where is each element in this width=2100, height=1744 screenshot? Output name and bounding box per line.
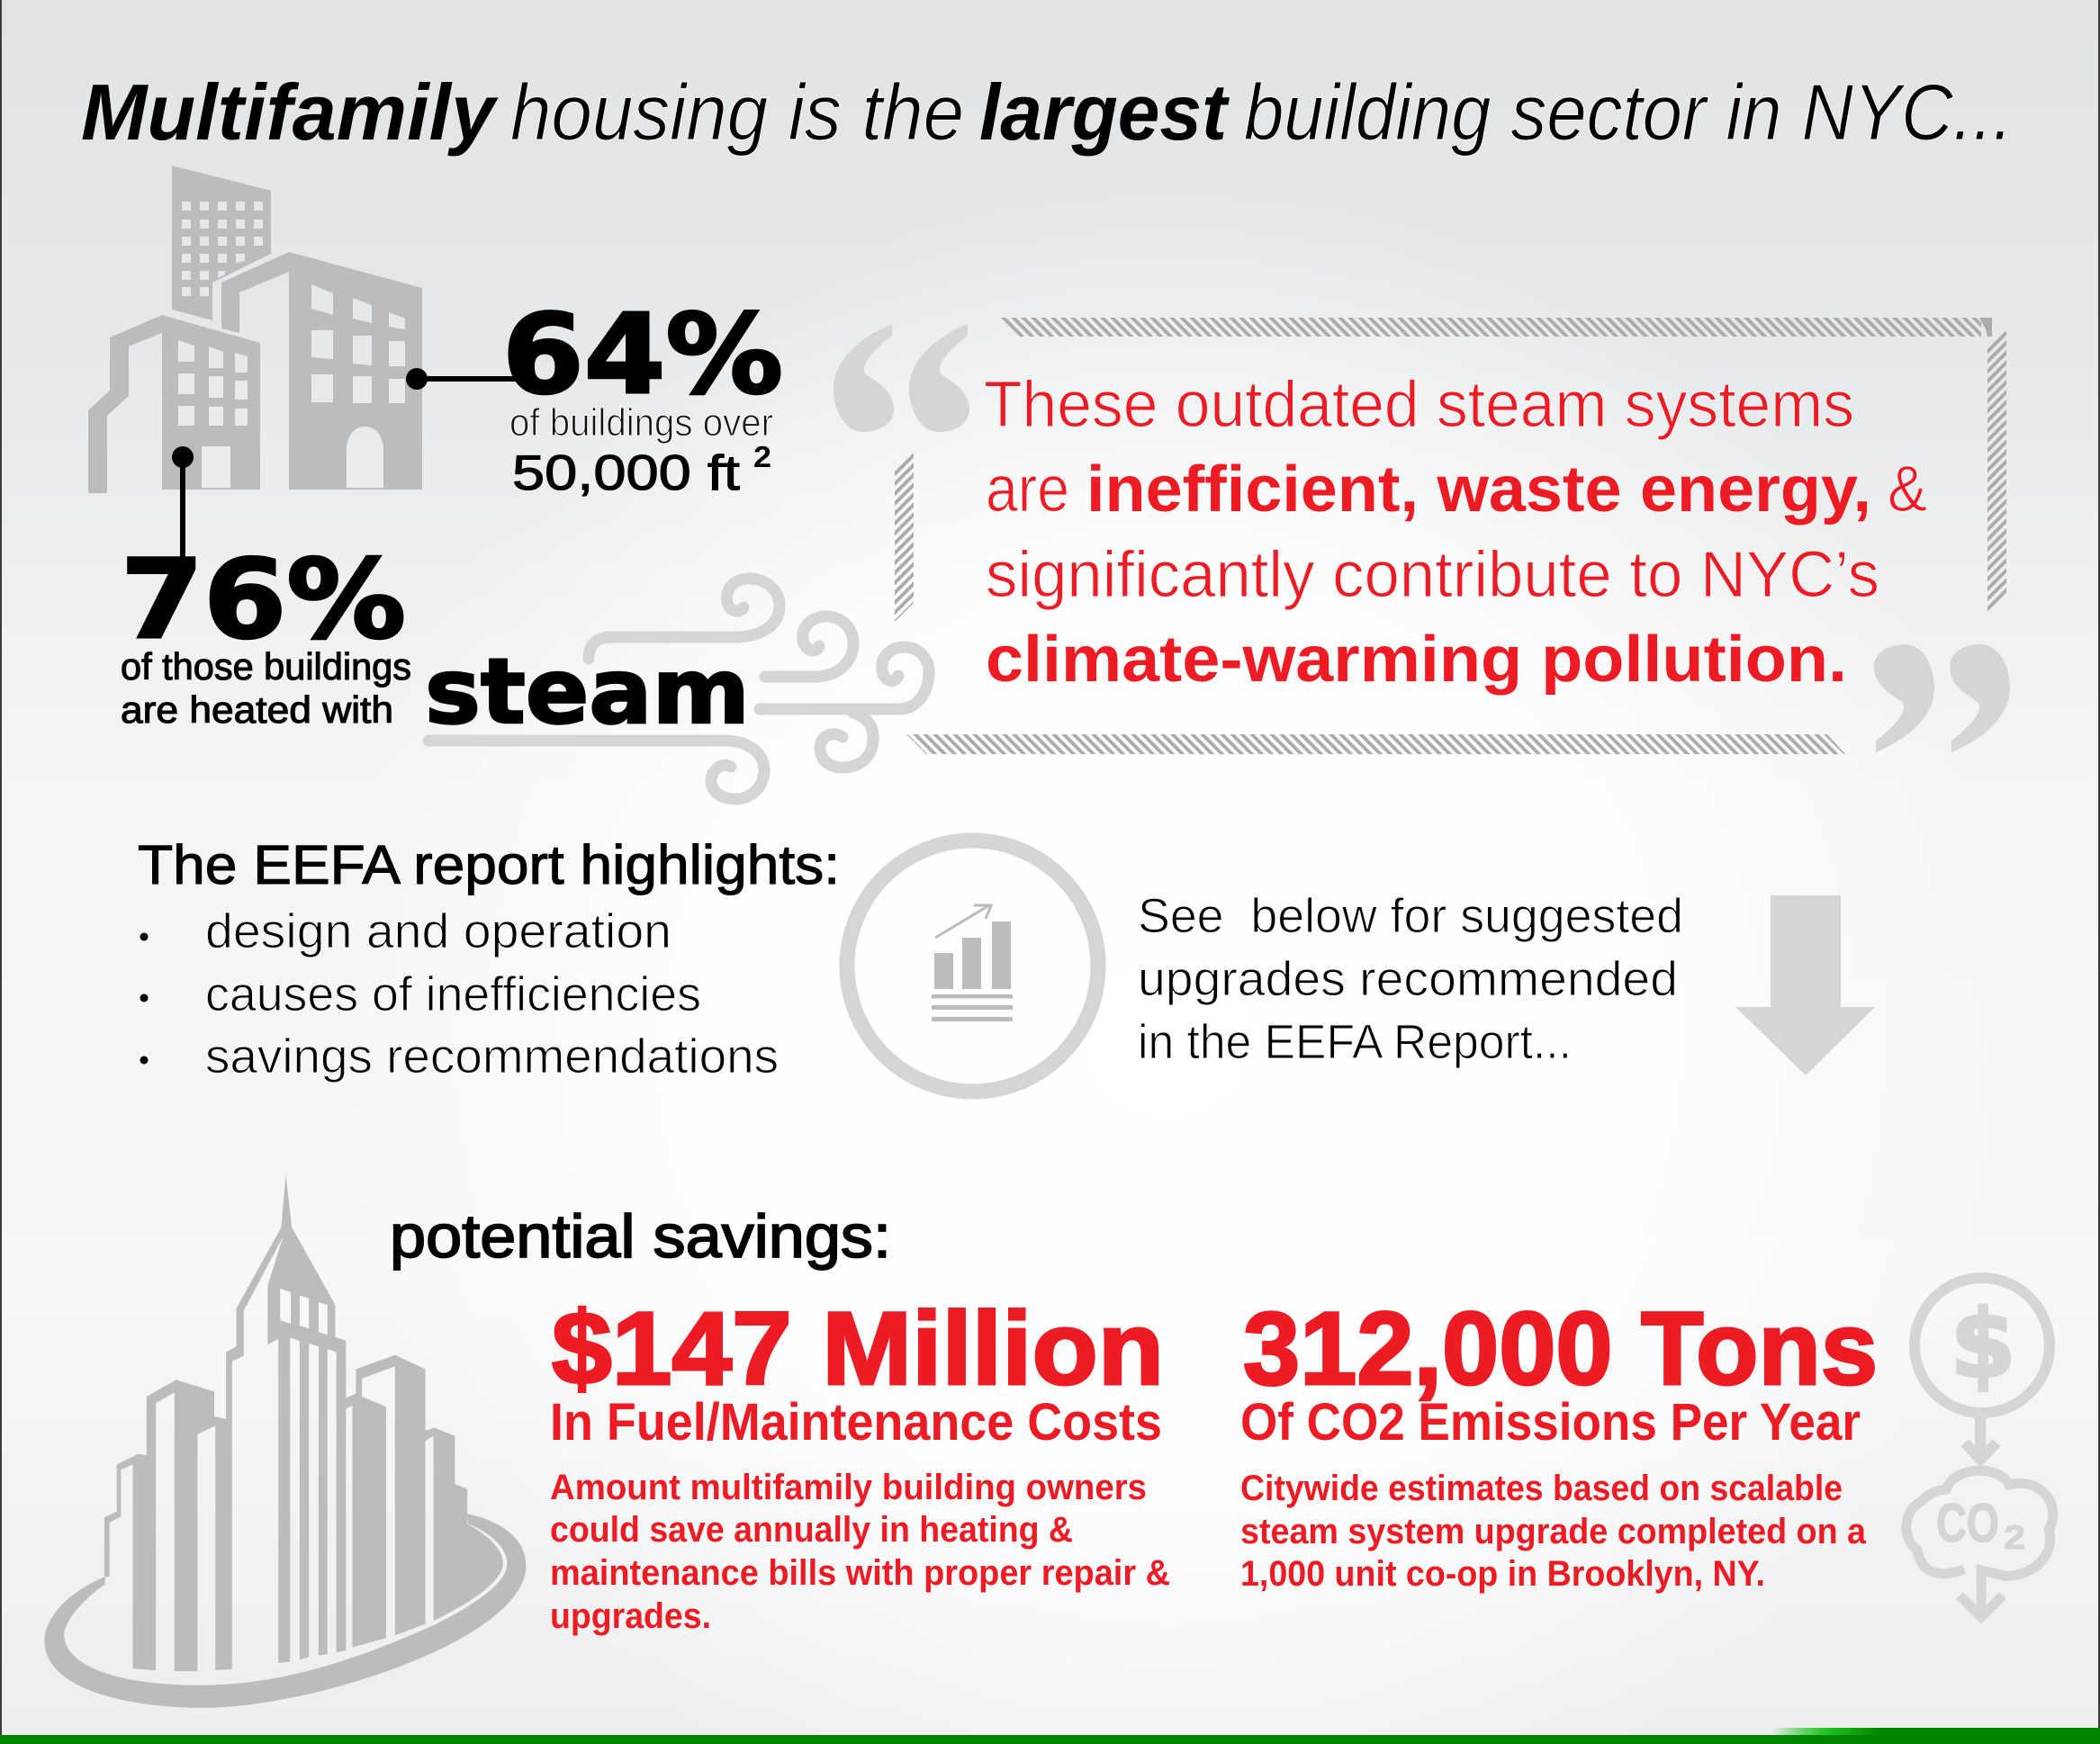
panel: cost savings: maintenance bills with proper repair & [550, 1553, 1170, 1593]
title: building sector in NYC... [1244, 67, 2013, 157]
highlights list: causes of inefficiencies [205, 967, 701, 1021]
icon: steam swirls [428, 579, 929, 799]
callout: 64% of buildings: of buildings over [509, 401, 773, 445]
quote frame [895, 318, 2006, 754]
front left building [88, 315, 260, 493]
callout: 64% of buildings: 2 [753, 440, 771, 473]
icon: dollar to CO2: $ [1951, 1290, 2015, 1399]
callout: 76% heated with steam: 76% [121, 536, 406, 663]
icon: closing quote mark [1874, 644, 2010, 752]
highlights list: design and operation [205, 904, 671, 958]
icon: report chart in circle [847, 841, 1098, 1092]
panel: emissions savings [1240, 1291, 1878, 1594]
quote text: inefficient, waste energy, [1086, 454, 1871, 526]
panel: emissions savings: Of CO2 Emissions Per Year [1240, 1393, 1861, 1452]
skyline [104, 1174, 503, 1671]
callout: 64% of buildings: 50,000 ft [512, 445, 740, 500]
icon: apartment buildings [88, 166, 422, 493]
text: see below: upgrades recommended [1138, 952, 1678, 1006]
callout: 76% heated with steam: steam [425, 639, 750, 744]
arrow: down [1735, 895, 1875, 1075]
middle building [221, 252, 422, 490]
title: housing is the [510, 67, 964, 157]
panel: cost savings: Amount multifamily building owners [550, 1468, 1147, 1507]
text: see below: in the EEFA Report... [1138, 1015, 1572, 1069]
callout: 76% heated with steam: are heated with [121, 688, 393, 731]
icon: dollar to CO2: 2 [2004, 1519, 2025, 1556]
icon: dollar to CO2 [1906, 1278, 2053, 1617]
quote text: & [1888, 454, 1927, 526]
text: see below: See below for suggested [1138, 889, 1683, 943]
callout: 64% of buildings [406, 291, 783, 500]
heading: EEFA report highlights: The EEFA report highlights: [138, 834, 840, 895]
icon: dollar to CO2: CO [1936, 1493, 1999, 1553]
callout: 64% of buildings: 64% [502, 291, 783, 418]
back tower [172, 166, 271, 320]
quote text: These outdated steam systems [984, 369, 1854, 441]
panel: cost savings: upgrades. [550, 1596, 711, 1636]
panel: emissions savings: 1,000 unit co-op in Brooklyn, NY. [1240, 1554, 1765, 1594]
text: see below [1138, 889, 1683, 1069]
callout: 76% heated with steam: of those buildings [121, 645, 411, 688]
title [81, 67, 2013, 157]
panel: cost savings: In Fuel/Maintenance Costs [550, 1393, 1162, 1452]
panel: cost savings: $147 Million [552, 1291, 1164, 1407]
quote text: are [986, 454, 1069, 526]
panel: cost savings [550, 1291, 1170, 1636]
swoosh [44, 1514, 526, 1708]
icon: opening quote mark [834, 324, 969, 432]
panel: cost savings: could save annually in heating & [550, 1510, 1073, 1550]
title: largest [979, 67, 1230, 157]
quote text: significantly contribute to NYC’s [986, 539, 1879, 611]
quote text [984, 369, 1927, 696]
panel: emissions savings: 312,000 Tons [1243, 1291, 1878, 1407]
highlights list: savings recommendations [205, 1029, 779, 1083]
panel: emissions savings: steam system upgrade completed on a [1240, 1512, 1867, 1551]
footer bar [0, 1728, 2100, 1744]
quote text: climate-warming pollution. [986, 624, 1847, 696]
panel: emissions savings: Citywide estimates based on scalable [1240, 1469, 1843, 1508]
heading: potential savings: potential savings: [390, 1202, 891, 1271]
title: Multifamily [81, 67, 499, 157]
highlights list [140, 904, 779, 1083]
callout: 76% heated with steam [121, 446, 750, 744]
icon: skyline on swoosh [44, 1174, 526, 1708]
